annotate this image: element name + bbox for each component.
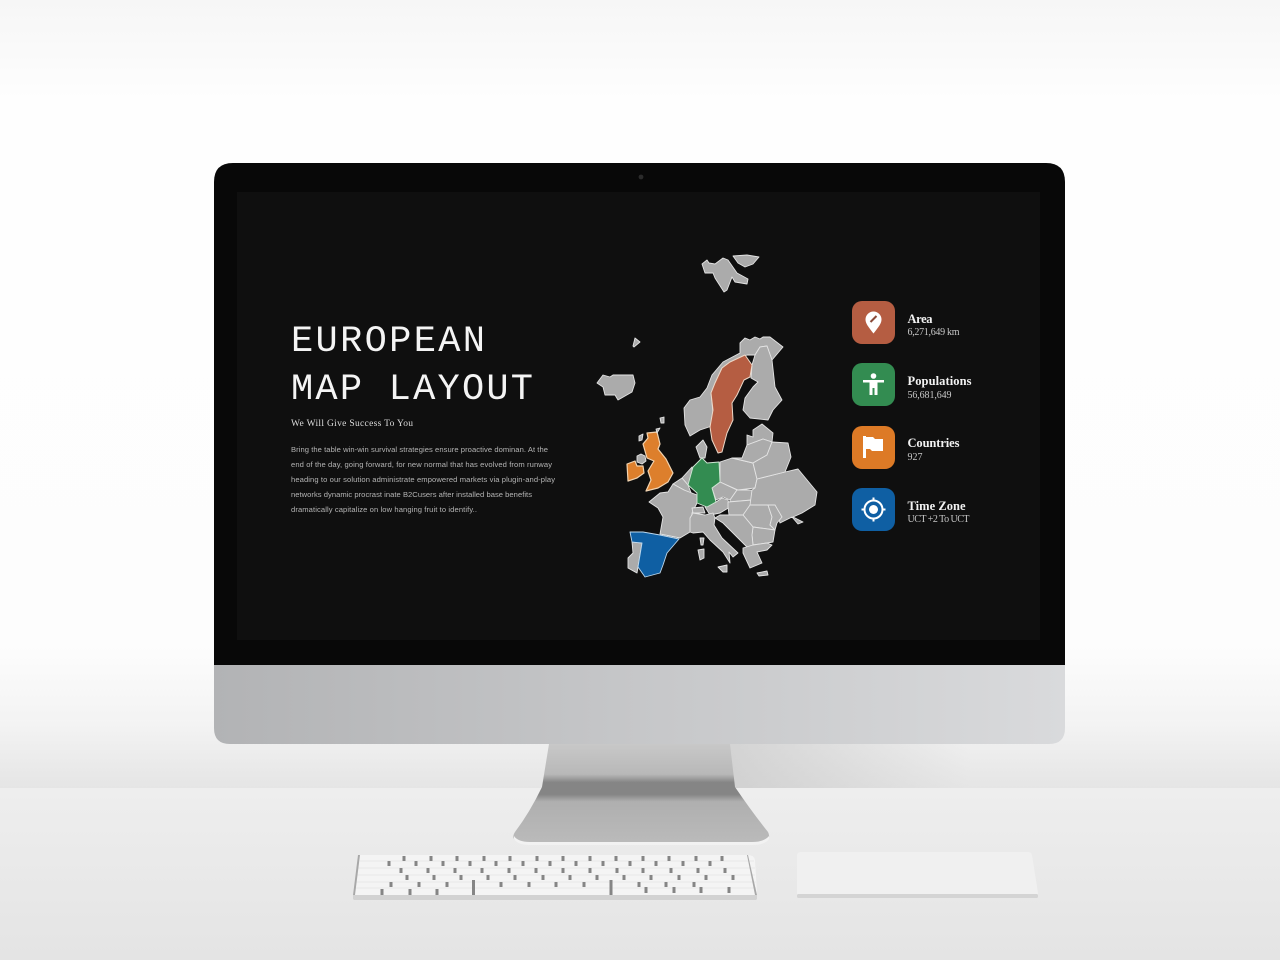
Hungary	[728, 500, 752, 515]
stat: area	[852, 301, 960, 344]
map of Europe	[597, 255, 817, 577]
value: populations: 56,681,649	[908, 390, 952, 401]
Scottish islands	[639, 417, 664, 441]
Switzerland	[692, 507, 705, 513]
Belarus	[753, 442, 791, 479]
body text	[291, 445, 555, 514]
body text: heading to our solution administrate empowered markets via plugin-and-play	[291, 475, 555, 484]
subtitle: We Will Give Success To You	[291, 419, 413, 429]
icon: target	[852, 488, 895, 531]
icon: person	[852, 363, 895, 406]
stat: countries	[852, 426, 960, 469]
Norway	[684, 337, 783, 436]
Moldova	[768, 505, 782, 530]
label: time zone: Time Zone	[908, 499, 966, 513]
Ukraine	[750, 469, 817, 524]
trackpad	[797, 852, 1038, 898]
body text: networks dynamic procrast inate B2Cusers after installed base benefits	[291, 490, 532, 499]
Lithuania	[732, 439, 772, 463]
value: countries: 927	[908, 452, 922, 463]
Sardinia	[698, 549, 704, 560]
stat: populations	[852, 363, 972, 406]
Spain	[630, 532, 679, 577]
title: EUROPEAN	[291, 321, 485, 363]
Romania	[743, 505, 775, 530]
body text: dramatically capitalize on low hanging fruit to identify..	[291, 505, 477, 514]
monitor	[214, 163, 1065, 744]
icon: flag	[852, 426, 895, 469]
title	[291, 321, 533, 411]
Netherlands	[682, 467, 692, 485]
monitor screen	[237, 192, 1040, 640]
Sweden	[710, 355, 752, 453]
France	[649, 484, 697, 538]
wall shadow	[730, 744, 970, 788]
value: time zone: UCT +2 To UCT	[908, 514, 970, 525]
background: desk	[0, 788, 1280, 960]
Svalbard	[702, 255, 759, 292]
body text: Bring the table win-win survival strategies ensure proactive dominan. At the	[291, 445, 548, 454]
Iceland	[597, 375, 635, 400]
Poland	[720, 458, 757, 490]
Portugal	[628, 542, 642, 573]
Finland	[743, 346, 782, 420]
Italy	[690, 513, 738, 563]
Corsica	[700, 538, 704, 545]
value: area: 6,271,649 km	[908, 327, 960, 338]
stat: time zone	[852, 488, 970, 531]
monitor stand	[513, 744, 769, 845]
icon: map pin	[852, 301, 895, 344]
label: populations: Populations	[908, 374, 972, 388]
Czech Republic	[712, 482, 737, 500]
Balkans	[715, 515, 753, 547]
label: area: Area	[908, 312, 933, 326]
camera	[639, 175, 643, 179]
Denmark	[696, 440, 707, 458]
Greece	[743, 543, 772, 568]
body text: end of the day, going forward, for new normal that has evolved from runway	[291, 460, 552, 469]
Estonia and Latvia	[747, 424, 773, 445]
monitor chin	[214, 660, 1065, 744]
Jan Mayen	[633, 338, 640, 347]
Belgium	[673, 478, 692, 495]
Ireland	[627, 461, 644, 481]
keyboard	[353, 855, 757, 900]
Slovakia	[730, 490, 752, 502]
Austria	[705, 498, 730, 515]
title: MAP LAYOUT	[291, 369, 533, 411]
Sicily	[718, 565, 727, 572]
Crete	[757, 571, 768, 576]
Northern Ireland	[637, 454, 646, 464]
Bulgaria	[752, 527, 775, 545]
label: countries: Countries	[908, 436, 960, 450]
monitor bezel	[214, 163, 1065, 665]
Germany	[688, 458, 720, 507]
Great Britain	[643, 432, 673, 491]
